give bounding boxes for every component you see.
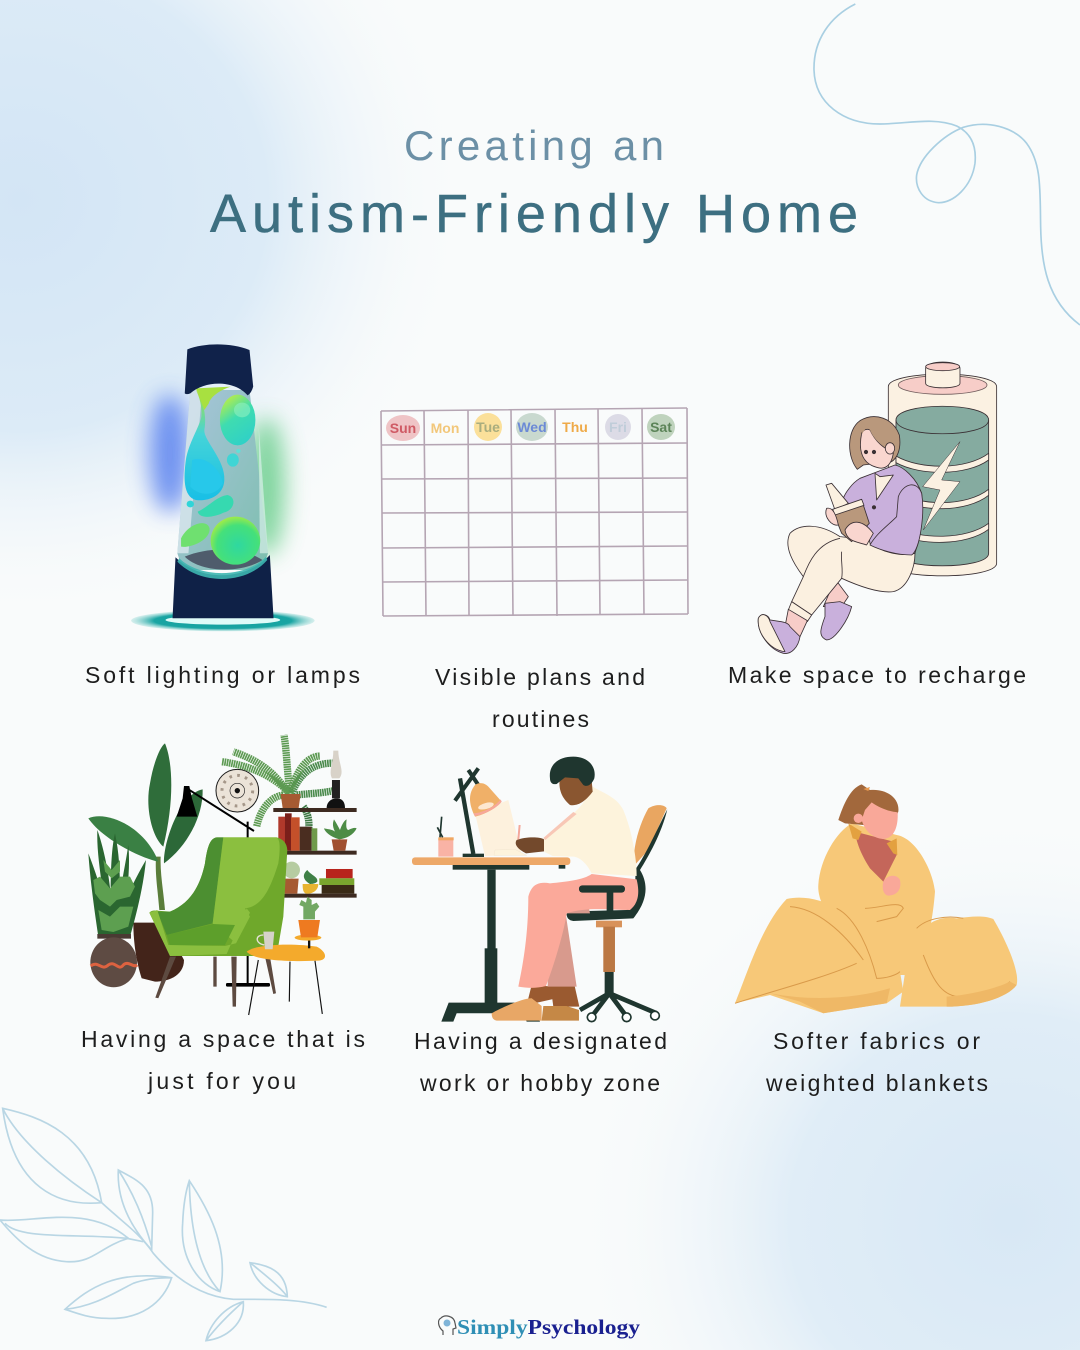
torso [843,465,922,555]
floor lamp [177,786,270,987]
caption: hobby zone: work or hobby zone [419,1070,660,1096]
day: Fri [605,414,631,440]
caption: recharge: Make space to recharge [728,662,1026,688]
title [210,122,858,244]
decorative leaf branch [0,1108,327,1341]
captions row 2 [81,1026,988,1096]
caption: own space: just for you [147,1068,296,1094]
battery [888,362,997,576]
side table with cup and cactus [247,897,325,1015]
day: Tue: Tue [476,419,500,435]
caption: plans: routines [492,706,589,732]
face [862,802,898,839]
caption: plans [435,664,645,732]
office chair [567,805,667,1022]
caption: hobby zone [414,1028,667,1096]
pencil cup [437,817,454,857]
caption: hobby zone: Having a designated [414,1028,667,1054]
captions row 1 [85,662,1026,732]
green armchair [149,837,287,1007]
day: Wed: Wed [517,419,547,435]
icon: lava lamp [131,344,315,631]
day: Fri: Fri [609,419,627,435]
hair and face [850,417,900,469]
book and hands [826,483,923,555]
icon: cosy room corner [88,735,357,1015]
day: Mon: Mon [431,420,459,436]
day: Thu: Thu [562,419,588,435]
caption: lamps: Soft lighting or lamps [85,662,360,688]
far leg [821,580,852,640]
desk [412,857,570,1022]
blanket lower right [900,917,1017,1007]
calendar [381,408,688,616]
logo text: Simply Psychology [457,1315,641,1339]
calendar grid [381,408,688,616]
day: Sat [647,414,675,440]
banana plant [88,743,203,982]
shirt and arms [494,786,637,876]
caption: fabrics: Softer fabrics or [773,1028,980,1054]
title line 2: Autism-Friendly Home [210,184,858,244]
icon: person wrapped in blanket [735,784,1017,1013]
icon: person at desk [412,757,667,1022]
caption: own space: Having a space that is [81,1026,365,1052]
blanket lower left [735,898,903,1013]
day: Sun: Sun [390,420,416,436]
trousers [518,874,638,988]
decorative curve [814,4,1080,325]
caption: plans: Visible plans and [435,664,645,690]
caption: own space [81,1026,365,1094]
icon: person reading against battery [758,362,997,654]
near leg and hips [758,526,915,654]
day: Tue [474,413,502,441]
snake plant [88,830,146,987]
caption: fabrics [765,1028,988,1096]
folds [735,905,1010,1003]
blanket body [818,823,935,975]
day: Sat: Sat [650,419,672,435]
wall clock [216,769,259,812]
day: Sun [386,415,420,441]
shelves with plants and books [273,751,357,898]
logo [439,1315,641,1339]
title line 1: Creating an [404,122,664,169]
head and hair [550,757,595,805]
caption: fabrics: weighted blankets [765,1070,988,1096]
hand [883,876,900,896]
feet [492,980,579,1021]
logo icon [439,1316,456,1335]
hair [838,784,898,825]
fern [222,735,337,832]
desk lamp [455,768,522,857]
shirt [855,832,897,882]
day: Wed [516,413,548,441]
